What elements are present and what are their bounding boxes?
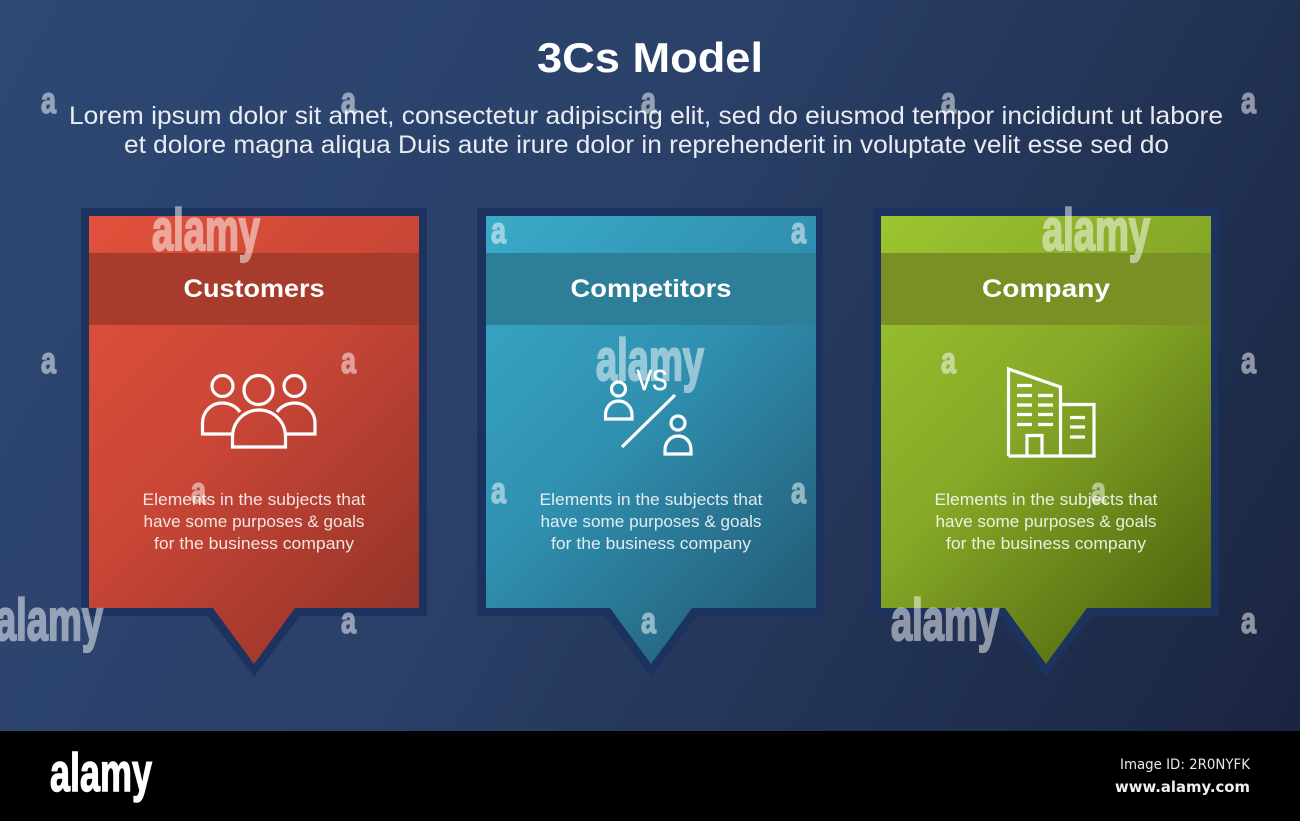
watermarks: large: alamy [1042, 198, 1150, 263]
watermarks: small: a [341, 340, 356, 381]
company description: have some purposes & goals [936, 512, 1156, 531]
company description: Elements in the subjects that [934, 490, 1158, 509]
company card outline [873, 208, 1219, 677]
competitors header band [486, 253, 816, 325]
customers header band [89, 253, 419, 325]
competitors description: for the business company [551, 534, 752, 553]
footer url: www.alamy.com [1115, 778, 1250, 796]
customers description [142, 490, 366, 553]
icon: group of people [202, 376, 315, 447]
competitors card outline [477, 208, 823, 677]
watermarks: small: a [1241, 340, 1256, 381]
watermarks: small: a [41, 80, 56, 121]
footer image id: Image ID: 2R0NYFK [1120, 757, 1251, 773]
company description: for the business company [946, 534, 1147, 553]
competitors description: have some purposes & goals [540, 512, 762, 531]
customers description: have some purposes & goals [144, 512, 364, 531]
watermarks: small: a [791, 210, 806, 251]
watermarks: small: a [41, 340, 56, 381]
subtitle text: et dolore magna aliqua Duis aute irure dolor in reprehenderit in voluptate velit esse sed do [124, 131, 1169, 159]
footer logo: alamy [50, 743, 152, 803]
title: 3Cs Model [537, 34, 763, 81]
subtitle text: Lorem ipsum dolor sit amet, consectetur adipiscing elit, sed do eiusmod tempor incididunt ut labore [69, 102, 1223, 130]
subtitle text [69, 102, 1223, 159]
watermarks: small: a [341, 80, 356, 121]
watermarks: small: a [1091, 470, 1106, 511]
watermarks: large: alamy [152, 198, 260, 263]
watermarks: small: a [1241, 600, 1256, 641]
watermarks: large: alamy [891, 588, 999, 653]
competitors description: Elements in the subjects that [540, 490, 763, 509]
watermarks: large: alamy [596, 328, 704, 393]
watermarks: small: a [341, 600, 356, 641]
watermarks: large [0, 198, 1150, 653]
company card body [881, 216, 1211, 664]
company header band [881, 253, 1211, 325]
customers heading: Customers [184, 275, 324, 303]
panel: competitors [477, 208, 823, 677]
watermarks: small: a [641, 600, 656, 641]
watermarks: small: a [641, 80, 656, 121]
customers description: for the business company [154, 534, 355, 553]
customers card body [89, 216, 419, 664]
icon: versus: VS [636, 365, 668, 397]
icon: versus [606, 365, 691, 454]
company heading: Company [982, 275, 1110, 303]
watermarks: small: a [941, 340, 956, 381]
icon: building [1008, 369, 1094, 456]
competitors heading: Competitors [570, 275, 732, 303]
watermarks: small: a [491, 210, 506, 251]
competitors description [540, 490, 763, 553]
panel: company [873, 208, 1219, 677]
footer bar [0, 731, 1300, 821]
watermarks: small: a [191, 470, 206, 511]
watermarks: small: a [1241, 80, 1256, 121]
competitors card body [486, 216, 816, 664]
watermarks: small: a [491, 470, 506, 511]
watermarks: small: a [791, 470, 806, 511]
customers card outline [81, 208, 427, 677]
customers description: Elements in the subjects that [142, 490, 366, 509]
company description [934, 490, 1158, 553]
panel: customers [81, 208, 427, 677]
watermarks: small [41, 80, 1256, 641]
watermarks: small: a [941, 80, 956, 121]
